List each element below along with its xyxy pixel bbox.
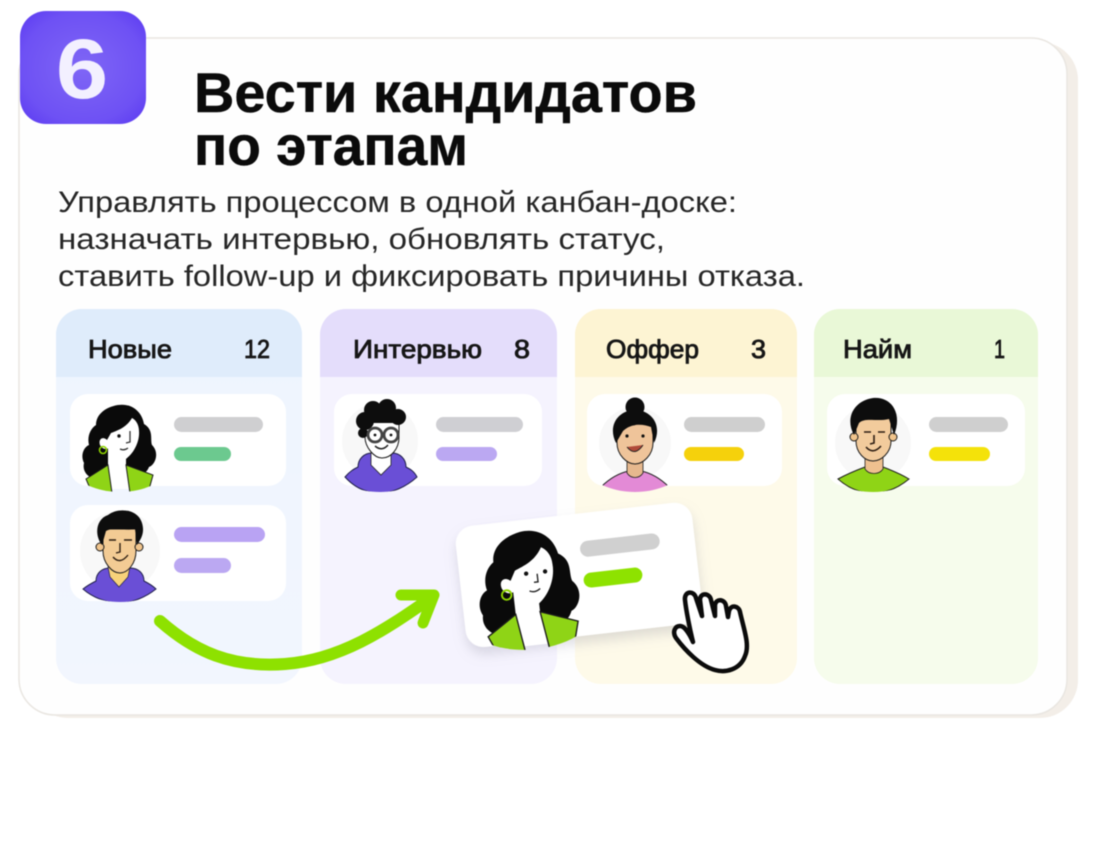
candidate card: woman, green tag [70,394,286,493]
candidate card: woman with bun [587,394,782,493]
description [58,186,805,293]
column: Найм: Найм [843,334,912,364]
title [194,61,697,177]
column: Новые: 12 [244,334,270,364]
number badge: 6 [56,22,108,116]
avatar: woman [478,530,580,651]
column: Интервью: 8 [514,334,530,364]
column: Найм: 1 [994,334,1005,364]
column: Интервью [320,309,557,684]
main card [19,38,1078,718]
dragged candidate card [454,501,705,658]
candidate card: man with glasses [334,394,542,493]
candidate card: man in green [827,394,1025,493]
number badge [20,11,146,124]
column: Новые [56,309,302,684]
column: Оффер [575,309,797,684]
column: Оффер: 3 [751,334,766,364]
arrow: drag path [160,595,434,665]
title: по этапам [194,114,468,177]
title: Вести кандидатов [194,61,697,124]
description: Управлять процессом в одной канбан-доске: [58,186,737,219]
description: ставить follow-up и фиксировать причины отказа. [58,260,805,293]
column: Интервью: Интервью [353,334,482,364]
column: Оффер: Оффер [606,334,699,364]
icon: grabbing hand cursor [674,593,747,671]
candidate card: man, purple tags [70,505,286,603]
column: Найм [814,309,1038,684]
description: назначать интервью, обновлять статус, [58,223,665,256]
column: Новые: Новые [88,334,172,364]
